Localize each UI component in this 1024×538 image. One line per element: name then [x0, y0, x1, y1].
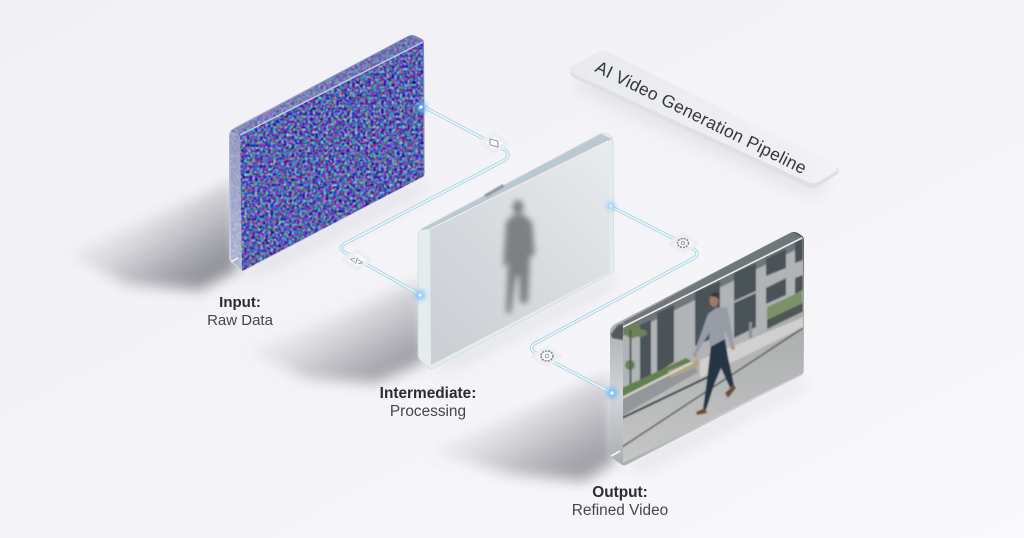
left edge noise	[230, 134, 242, 270]
title text: AI Video Generation Pipeline	[592, 57, 810, 178]
glass body	[418, 133, 614, 369]
corner glint	[231, 258, 238, 262]
shirt	[694, 307, 734, 355]
shadow: intermediate panel	[250, 280, 425, 383]
bollard	[749, 322, 752, 338]
photo	[620, 225, 806, 470]
node: gear icon top	[670, 234, 697, 252]
building	[623, 232, 803, 388]
dark lines	[622, 377, 708, 418]
glow point	[416, 102, 426, 112]
shoes	[696, 408, 707, 415]
label: output: Output:	[592, 484, 648, 501]
man	[693, 292, 736, 415]
hand	[731, 346, 735, 350]
glow point	[607, 202, 615, 210]
label: input: Input:	[219, 294, 261, 311]
label: input	[207, 294, 274, 329]
glass body	[229, 35, 425, 271]
node: gear icon bottom	[533, 348, 560, 365]
node: image icon	[482, 134, 507, 152]
label: intermediate	[380, 385, 476, 420]
top corner dark	[611, 322, 628, 340]
panel: intermediate processing	[416, 133, 615, 369]
glass body	[610, 232, 804, 465]
blurred person	[503, 200, 535, 313]
node: code icon: </>	[350, 254, 363, 268]
corner glint	[611, 451, 620, 456]
top edge noise	[231, 36, 423, 136]
shadow: floor glow under panels	[243, 178, 808, 474]
label: intermediate: Intermediate:	[380, 385, 476, 402]
panel: output refined video	[607, 225, 806, 470]
plaque face	[569, 50, 837, 184]
plaque side	[570, 52, 839, 188]
panel: input raw data	[229, 35, 426, 271]
glow point	[607, 388, 617, 398]
top highlight	[430, 141, 608, 229]
node: code icon	[344, 251, 370, 269]
noise face	[240, 43, 424, 271]
hedge right	[766, 290, 803, 320]
windows	[640, 238, 803, 388]
glow point	[416, 290, 424, 300]
connector: intermediate to output	[532, 207, 697, 393]
label: intermediate: Processing	[390, 403, 466, 420]
plaque shadow	[572, 70, 832, 198]
planter	[623, 367, 698, 416]
head	[710, 293, 718, 307]
label: output: Refined Video	[572, 502, 668, 519]
shadow: input panel	[70, 180, 238, 290]
top edge dark reflection	[484, 184, 504, 197]
connector: input to intermediate	[342, 107, 508, 295]
legs	[703, 339, 734, 410]
shadow: output panel	[432, 372, 615, 481]
title plaque	[569, 50, 839, 198]
frosted face	[430, 141, 610, 365]
label: input: Raw Data	[207, 312, 274, 329]
top reflection band	[623, 230, 803, 336]
top highlight	[240, 42, 423, 135]
ground	[620, 310, 806, 470]
label: output	[572, 484, 668, 519]
tree	[624, 322, 647, 390]
top edge	[420, 134, 612, 230]
top highlight	[623, 238, 802, 327]
